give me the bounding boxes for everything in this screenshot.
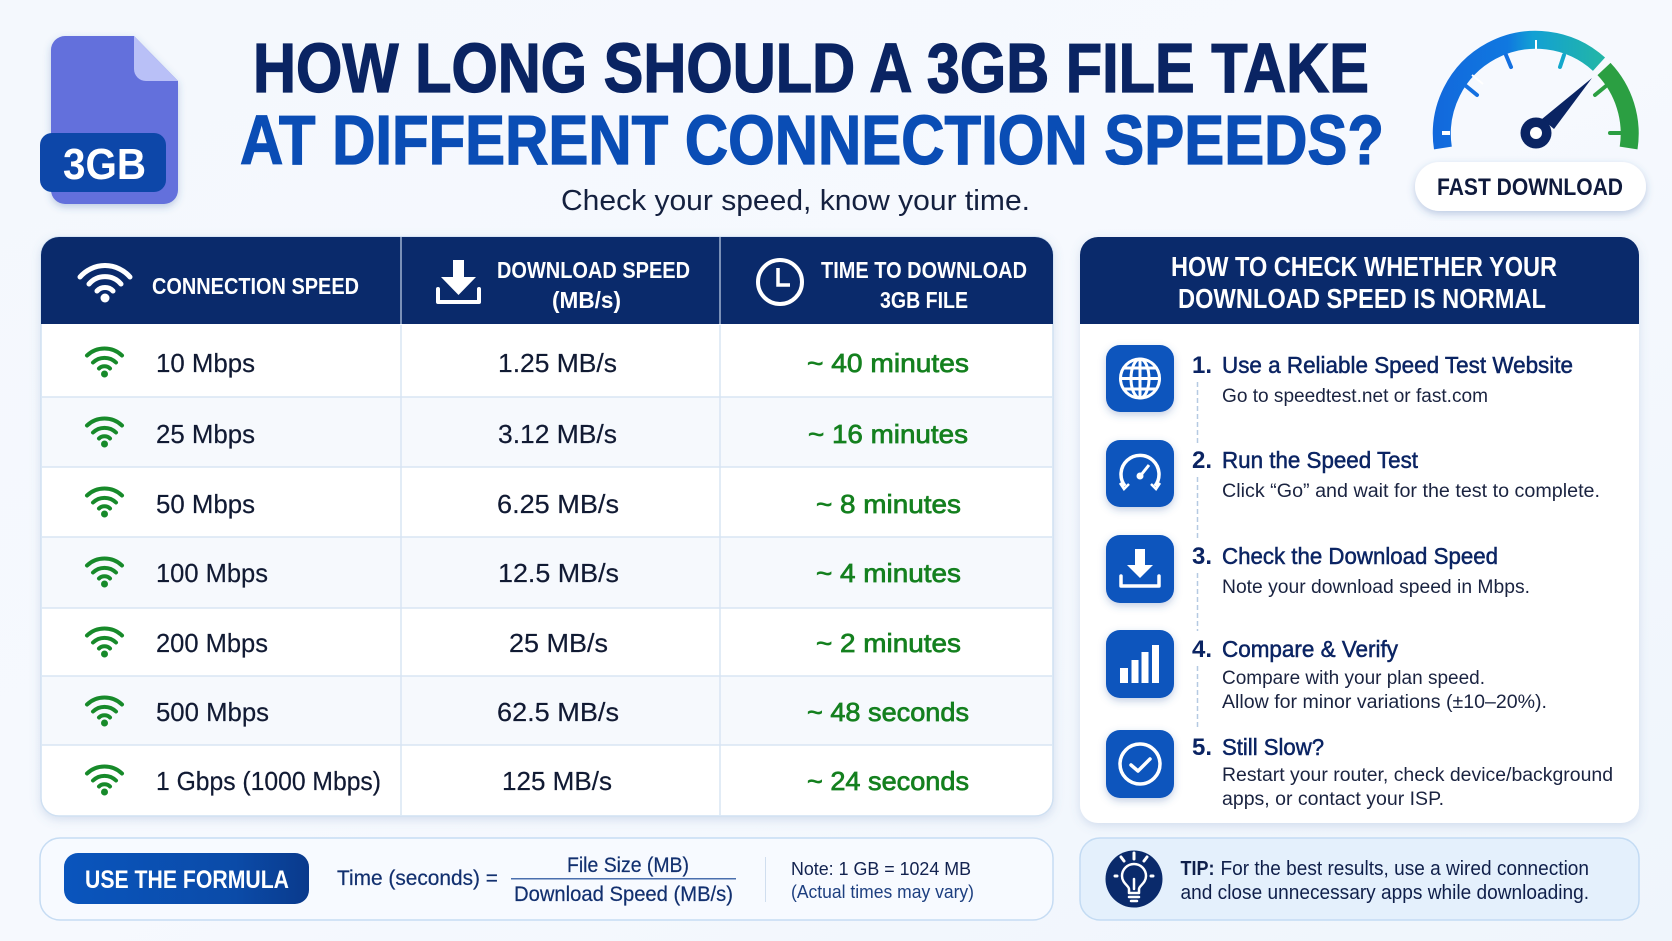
panel header: DOWNLOAD SPEED IS NORMAL (1178, 283, 1546, 314)
step 2: Click “Go” and wait for the test to complete. (1222, 481, 1600, 502)
note (791, 858, 974, 902)
table header: TIME TO DOWNLOAD (821, 257, 1027, 283)
panel: tip: For the best results, use a wired connection (1220, 858, 1589, 880)
icon: header clock (758, 260, 802, 304)
badge: fast download (1415, 162, 1646, 211)
table row: 1 Gbps: 1 Gbps (1000 Mbps) (156, 766, 381, 796)
icon: bar chart (1120, 645, 1159, 683)
table row: 10 Mbps: ~ 40 minutes (807, 348, 969, 378)
panel header (1080, 237, 1639, 324)
icon: header wifi (80, 266, 130, 302)
panel: how to check download speed (1080, 237, 1639, 823)
table row: 1 Gbps: ~ 24 seconds (807, 766, 969, 796)
table header (41, 237, 1053, 324)
step 3: Note your download speed in Mbps. (1222, 577, 1530, 598)
table row: 200 Mbps: ~ 2 minutes (816, 628, 961, 658)
step 1: Go to speedtest.net or fast.com (1222, 386, 1488, 407)
step 5: apps, or contact your ISP. (1222, 789, 1444, 810)
table row: 10 Mbps (87, 348, 969, 378)
table row: 100 Mbps: 12.5 MB/s (498, 558, 619, 588)
table row: 500 Mbps: 62.5 MB/s (497, 697, 619, 727)
formula: Download Speed (MB/s) (514, 883, 733, 906)
step 2 (1106, 440, 1600, 507)
title: HOW LONG SHOULD A 3GB FILE TAKE (253, 29, 1369, 107)
icon: check circle (1120, 744, 1160, 784)
title (240, 29, 1384, 179)
step 1: Use a Reliable Speed Test Website (1222, 352, 1573, 378)
icon: download (1121, 549, 1159, 586)
panel: tip: and close unnecessary apps while downloading. (1180, 882, 1589, 904)
icon: 3GB file (40, 36, 178, 204)
table row: 200 Mbps (87, 628, 961, 658)
badge: fast download: FAST DOWNLOAD (1437, 174, 1623, 201)
step 3: 3. (1192, 543, 1212, 570)
panel: tip (1080, 838, 1639, 920)
table header: CONNECTION SPEED (152, 273, 359, 299)
panel header: HOW TO CHECK WHETHER YOUR (1171, 251, 1557, 282)
icon: header download (438, 260, 479, 302)
table row: 25 Mbps: ~ 16 minutes (808, 419, 968, 449)
icon: speedometer gauge (1442, 40, 1630, 148)
table row: 50 Mbps: 50 Mbps (156, 489, 255, 519)
table row: 200 Mbps: 200 Mbps (156, 628, 268, 658)
table row: 50 Mbps: ~ 8 minutes (816, 489, 961, 519)
table header: DOWNLOAD SPEED (497, 257, 690, 283)
note: Note: 1 GB = 1024 MB (791, 858, 971, 879)
table row: 10 Mbps: 10 Mbps (156, 348, 255, 378)
table row: 500 Mbps: 500 Mbps (156, 697, 269, 727)
button: use the formula: USE THE FORMULA (85, 866, 289, 894)
table header: (MB/s) (552, 287, 621, 313)
table row: 1 Gbps: 125 MB/s (502, 766, 612, 796)
table row: 50 Mbps: 6.25 MB/s (497, 489, 619, 519)
step 5 (1106, 730, 1613, 810)
step 5: Still Slow? (1222, 734, 1324, 760)
table row: 100 Mbps: 100 Mbps (156, 558, 268, 588)
subtitle: Check your speed, know your time. (561, 185, 1030, 217)
table row: 100 Mbps: ~ 4 minutes (816, 558, 961, 588)
icon: light bulb (1106, 850, 1162, 908)
table row: 200 Mbps: 25 MB/s (509, 628, 608, 658)
button: use the formula (64, 853, 309, 904)
table row: 25 Mbps: 3.12 MB/s (498, 419, 617, 449)
icon: globe (1120, 359, 1160, 398)
table row: 10 Mbps: 1.25 MB/s (498, 348, 617, 378)
step 4: 4. (1192, 636, 1212, 663)
step 4: Compare & Verify (1222, 636, 1398, 662)
table row: 25 Mbps: 25 Mbps (156, 419, 255, 449)
step 4: Compare with your plan speed. (1222, 668, 1485, 689)
table row: 25 Mbps (87, 419, 968, 449)
title: AT DIFFERENT CONNECTION SPEEDS? (240, 101, 1384, 179)
table row: 500 Mbps: ~ 48 seconds (807, 697, 969, 727)
note: (Actual times may vary) (791, 881, 974, 902)
panel: speed table (41, 237, 1053, 816)
step 5: 5. (1192, 734, 1212, 761)
table row: 50 Mbps (87, 489, 961, 519)
step 1 (1106, 345, 1573, 412)
formula: Time (seconds) = (337, 867, 498, 890)
table header: 3GB FILE (880, 287, 968, 313)
table row: 1 Gbps (87, 766, 969, 796)
icon: 3GB file: 3GB (63, 140, 146, 189)
step 1: 1. (1192, 352, 1212, 379)
step 2: Run the Speed Test (1222, 447, 1419, 473)
step 5: Restart your router, check device/background (1222, 765, 1613, 786)
icon: gauge (1120, 455, 1160, 489)
step 4: Allow for minor variations (±10–20%). (1222, 692, 1547, 713)
table row: 100 Mbps (87, 558, 961, 588)
step 3 (1106, 535, 1530, 603)
formula: File Size (MB) (567, 854, 689, 877)
step 3: Check the Download Speed (1222, 543, 1498, 569)
step 4 (1106, 630, 1547, 713)
table row: 500 Mbps (87, 697, 969, 727)
panel: formula (40, 838, 1053, 920)
step 2: 2. (1192, 447, 1212, 474)
formula (337, 854, 736, 906)
panel: tip: TIP: (1180, 858, 1214, 880)
